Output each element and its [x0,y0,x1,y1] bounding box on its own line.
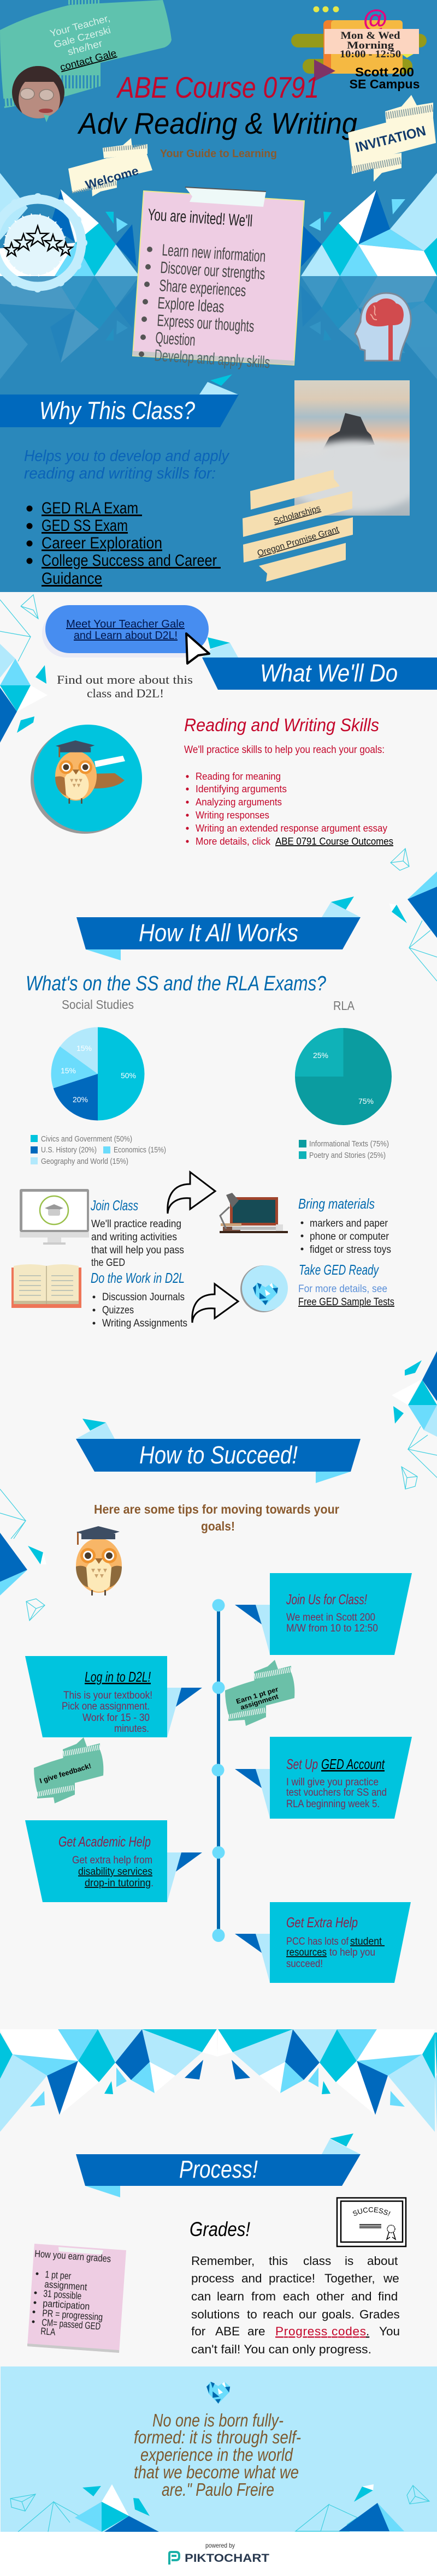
card: get academic help: drop-in tutoring [85,1878,151,1889]
chart: rla [295,999,392,1160]
badge with stars [0,197,84,289]
card: get academic help: disability services [78,1866,152,1878]
skills list: Identifying arguments [196,784,287,794]
grades paragraph: each [283,2290,310,2303]
teacher name text: Gale Czerski [52,25,112,50]
note text: Discover our strengths [160,259,265,283]
schedule sign: @ [363,4,387,33]
heading: grades: Grades! [190,2218,250,2240]
card: get academic help: Get extra help from [72,1855,152,1866]
scholarship ribbon: Scholarships [273,504,322,526]
why list: Career Exploration [42,534,162,552]
schedule sign: 10:00 - 12:50 [340,49,401,60]
icon: owl in circle [31,725,142,834]
icon: heart in circle [240,1265,288,1312]
heading: how to succeed: How to Succeed! [139,1441,298,1469]
panel: do the work: Discussion Journals [102,1292,185,1303]
why text: Helps you to develop and apply [24,447,229,465]
panel: join class: and writing activities [91,1232,177,1243]
invitation ribbon [348,95,436,182]
skills list: Reading for meaning [196,771,281,782]
card: get extra help: to help you [329,1947,375,1958]
teacher name text: contact Gale [59,47,117,73]
grades paragraph: process [191,2272,234,2285]
welcome ribbon: Welcome [84,164,140,192]
legend: rla: Poetry and Stories (25%) [309,1151,386,1160]
button: meet your teacher: Meet Your Teacher Gale [66,618,185,630]
left crystal decoration [0,595,48,743]
grades paragraph: You [379,2324,400,2338]
grades paragraph: reach [263,2308,293,2321]
panel: take ged ready: For more details, see [298,1283,387,1295]
icon: head with brain [355,293,411,361]
welcome ribbon [68,138,152,196]
campus location [350,65,420,91]
sticky note: how you earn grades: assignment [44,2279,87,2292]
schedule sign [291,4,427,81]
skills list: ABE 0791 Course Outcomes [275,836,393,847]
ribbon: earn 1 pt: Earn 1 pt per [235,1686,279,1706]
skills list: More details, click [196,836,271,847]
card: log in to d2l: Pick one assignment. [62,1701,150,1712]
sticky note: how you earn grades: RLA [40,2326,56,2338]
icon: desk with chalkboard [220,1193,288,1233]
legend: social studies: U.S. History (20%) [41,1145,97,1155]
grades paragraph: from [251,2290,276,2303]
chart: social studies: Social Studies [62,997,134,1012]
quote text [134,2410,301,2500]
right crystal decoration [389,848,437,981]
grades paragraph: other [316,2290,345,2303]
sticky note: how you earn grades: 31 possible [43,2288,82,2302]
crystal band [0,2029,437,2132]
note text: Express our thoughts [157,312,255,336]
card: get extra help: succeed! [286,1958,323,1970]
tips text [94,1502,339,1533]
panel: take ged ready: Free GED Sample Tests [298,1296,394,1308]
grades paragraph: Grades [359,2308,400,2321]
panel: take ged ready [298,1262,394,1308]
card: set up ged account: I will give you practice [286,1777,379,1788]
panel: do the work: Quizzes [102,1305,134,1316]
quote text: are." Paulo Freire [162,2479,274,2500]
sticky note: how you earn grades: PR = progressing [42,2308,103,2323]
grades paragraph: practice! [269,2272,315,2285]
panel: bring materials: phone or computer [310,1231,389,1242]
grades paragraph: about [367,2254,398,2268]
panel: join class: We'll practice reading [91,1218,181,1230]
heading: why this class: Why This Class? [39,397,195,425]
find out more text [57,673,193,700]
why list: College Success and Career [42,552,221,570]
button: meet your teacher: and Learn about D2L! [74,630,178,642]
legend: social studies [31,1134,166,1166]
scholarship ribbon: Oregon Promise Grant [256,525,340,558]
teacher speech blob [0,0,172,108]
panel: reading and writing skills: We'll practice skills to help you reach your goals: [184,744,385,756]
note text: Share experiences [159,277,246,300]
chart: rla: RLA [333,999,355,1013]
title: ABE Course 0791 [116,70,319,104]
chart: social studies: 20% [73,1095,88,1104]
bottom mountains [10,2484,429,2532]
icon: certificate [336,2197,406,2247]
grades paragraph: can [191,2290,211,2303]
chart: rla: 25% [313,1051,328,1060]
invitation ribbon: INVITATION [354,123,427,156]
arrow [192,1284,238,1323]
card: set up ged account: Set Up [286,1756,318,1772]
card: get extra help: PCC has lots of [286,1936,349,1947]
chart: social studies [31,997,166,1166]
grades paragraph: are [247,2324,265,2338]
mountain photo [294,380,410,516]
ribbon: earn 1 pt: assignment [239,1693,280,1711]
card: set up ged account: GED Account [321,1756,385,1772]
panel: bring materials: fidget or stress toys [310,1244,391,1256]
grades paragraph: Progress codes [275,2324,366,2338]
heading: exams: What's on the SS and the RLA Exams? [26,972,327,995]
grades paragraph: is [345,2254,353,2268]
note text: You are invited! We'll [147,206,253,230]
card: get extra help: student [350,1936,385,1947]
panel: bring materials: markers and paper [310,1218,388,1229]
card: join us for class [235,1573,412,1655]
panel: reading and writing skills: Reading and Writing Skills [184,715,379,735]
footer: powered by [205,2542,235,2549]
why list: GED RLA Exam [42,499,142,517]
card: log in to d2l [25,1656,202,1737]
grades paragraph: our [299,2308,317,2321]
ribbon: i give feedback: I give feedback! [39,1761,92,1785]
heading: process [76,2133,361,2197]
grades paragraph: find [378,2290,398,2303]
mountain range [0,173,437,276]
heading: process: Process! [179,2155,258,2183]
grades paragraph: and [241,2272,262,2285]
why list: GED SS Exam [42,517,128,535]
quote text: No one is born fully- [152,2410,284,2430]
card: set up ged account: test vouchers for SS and [286,1787,387,1798]
card: get extra help: Get Extra Help [286,1914,358,1930]
card: join us for class: We meet in Scott 200 [286,1612,375,1623]
chart: social studies: 50% [121,1071,136,1080]
note text: Explore Ideas [157,294,225,316]
note text: Learn new information [162,241,266,266]
campus location: Scott 200 [355,65,414,79]
quote text: experience in the world [140,2444,293,2465]
left crystal decoration 3 [0,1489,46,1621]
teacher photo [11,65,66,123]
title: Adv Reading & Writing [77,106,357,140]
footer: PIKTOCHART [185,2552,269,2565]
scholarship ribbon [243,470,353,582]
heading: how it all works [76,896,361,960]
why list [26,499,221,588]
schedule sign: Morning [347,40,394,51]
card: set up ged account [235,1737,412,1819]
card: join us for class: M/W from 10 to 12:50 [286,1623,378,1634]
note text [147,206,270,372]
panel: header and why this class [0,0,437,592]
grades paragraph: Remember, [191,2254,255,2268]
what we'll do fold [202,637,238,658]
grades paragraph: solutions [191,2308,240,2321]
panel: bring materials: Bring materials [298,1196,375,1212]
skills list [186,771,393,847]
chart: rla: 75% [358,1097,374,1105]
grades paragraph: for [191,2324,206,2338]
card: set up ged account: RLA beginning week 5. [286,1798,380,1810]
card: get extra help [235,1902,411,1983]
title: Your Guide to Learning [160,148,277,160]
grades paragraph: Together, [324,2272,375,2285]
panel: quote [1,2366,437,2532]
card: get academic help: . [151,1878,153,1889]
teacher name text: she/her [66,38,103,57]
panel: bring materials [298,1196,391,1256]
tips text: Here are some tips for moving towards your [94,1502,339,1516]
sticky note: how you earn grades: How you earn grades [34,2248,111,2264]
heading: how it all works: How It All Works [139,919,298,947]
ribbon: i give feedback [34,1737,103,1803]
panel: do the work [91,1270,187,1329]
panel: do the work: Writing Assignments [102,1318,187,1329]
skills list: Writing responses [196,810,269,821]
card: log in to d2l: Work for 15 - 30 [82,1712,150,1724]
panel: join class: that will help you pass [91,1245,184,1256]
icon: piktochart logo [169,2552,179,2565]
sticky note: how you earn grades [27,2244,126,2353]
quote text: formed: it is through self- [134,2427,301,2447]
heading: why this class [0,395,239,427]
grades paragraph: to [247,2308,257,2321]
icon: monitor [20,1189,89,1245]
grades paragraph: can't fail! You can only progress. [191,2342,371,2356]
schedule sign: Mon & Wed [341,30,400,41]
panel: join class: the GED [91,1257,125,1269]
title [77,70,357,160]
icon: open book [11,1264,81,1308]
card: join us for class: Join Us for Class! [286,1591,367,1607]
why text [24,447,229,482]
quote text: that we become what we [134,2462,299,2482]
mountain reflection [0,276,437,379]
icon: heart [206,2382,230,2404]
sticky note invitation [133,187,304,372]
teacher name text [49,13,117,73]
card: get academic help: Get Academic Help [58,1833,151,1850]
find out more text: class and D2L! [87,686,164,700]
find out more text: Find out more about this [57,673,193,686]
arrow [168,1172,215,1214]
panel: do the work: Do the Work in D2L [91,1270,185,1286]
button: meet your teacher [42,605,209,658]
icon: mouse cursor [186,633,209,664]
panel: join class: Join Class [90,1197,138,1214]
legend: social studies: Economics (15%) [114,1145,166,1155]
grades paragraph: this [269,2254,288,2268]
note text: Question [155,329,196,350]
grades paragraph: and [351,2290,372,2303]
panel: take ged ready: Take GED Ready [299,1262,379,1278]
grades paragraph: class [303,2254,331,2268]
grades paragraph [191,2254,400,2356]
timeline [212,1599,225,1942]
grades paragraph: goals. [322,2308,355,2321]
grades paragraph: we [383,2272,399,2285]
card: log in to d2l: Log in to D2L! [85,1669,151,1685]
skills list: Analyzing arguments [196,797,282,808]
sticky note: how you earn grades: participation [43,2298,90,2312]
panel: reading and writing skills [184,715,393,847]
sticky note: how you earn grades: CM= passed GED [42,2317,101,2332]
why text: reading and writing skills for: [24,465,216,482]
legend: rla: Informational Texts (75%) [309,1139,389,1149]
card: get extra help: resources [286,1947,327,1958]
why banner fold [199,374,238,395]
icon: certificate: SUCCESS! [353,2207,391,2216]
heading: what we'll do [202,658,437,690]
ribbon: earn 1 pt [225,1660,294,1726]
legend: social studies: Civics and Government (50%) [41,1134,132,1144]
card: log in to d2l: This is your textbook! [63,1690,152,1701]
chart: social studies: 15% [76,1044,92,1053]
why list: Guidance [42,570,102,588]
card: get academic help [25,1820,202,1902]
footer [0,2532,437,2576]
legend: social studies: Geography and World (15%) [41,1157,128,1166]
campus location: SE Campus [350,77,420,91]
tips text: goals! [201,1519,235,1533]
legend: rla [299,1139,389,1160]
icon: owl with cap [76,1526,122,1595]
card: log in to d2l: minutes. [114,1723,149,1735]
sticky note: how you earn grades: 1 pt per [45,2269,72,2281]
grades paragraph: ABE [215,2324,240,2338]
panel: join class [90,1197,184,1269]
heading: how to succeed [76,1419,361,1483]
grades paragraph: . [366,2324,369,2338]
chart: social studies: 15% [61,1066,76,1075]
note text: Develop and apply skills [154,346,270,372]
teacher name text: Your Teacher, [49,13,111,39]
right crystal decoration 2 [392,1351,437,1489]
heading: what we'll do: What We'll Do [260,659,398,687]
grades paragraph: learn [217,2290,244,2303]
skills list: Writing an extended response argument essay [196,823,387,834]
